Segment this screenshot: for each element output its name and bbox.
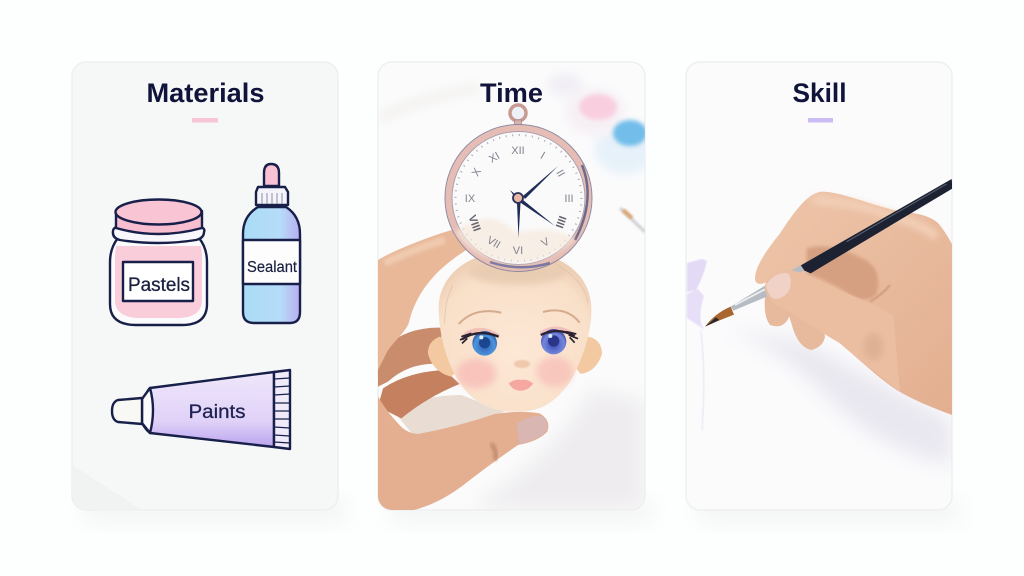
icon: paints tube — [112, 370, 290, 449]
doll head — [428, 251, 602, 412]
dial numerals: IIII — [554, 215, 570, 230]
pocket watch — [445, 105, 592, 272]
eye left — [463, 330, 499, 337]
label: sealant: Sealant — [247, 259, 298, 276]
panel: time — [378, 62, 655, 522]
clock shadow on forehead — [470, 262, 566, 286]
dial numerals: IX — [465, 193, 476, 205]
hand holding doll — [378, 230, 548, 511]
dial numerals — [465, 145, 574, 257]
dial numerals: I — [538, 150, 547, 162]
scalp seam — [445, 263, 588, 323]
face — [439, 251, 591, 412]
dial numerals: XII — [511, 145, 525, 157]
hand shadow — [763, 336, 951, 462]
watch hands — [510, 166, 558, 238]
cheeks — [456, 358, 496, 388]
accent bar: skill — [808, 118, 833, 122]
heading: materials: Materials — [146, 78, 264, 108]
dial numerals: III — [564, 193, 574, 205]
blurred palette background — [380, 73, 655, 232]
dial numerals: V — [539, 236, 552, 250]
dial numerals: VII — [485, 234, 502, 251]
see-through head at base of dial — [455, 218, 575, 263]
brows — [459, 311, 501, 324]
shading between fingers — [807, 246, 878, 299]
lavender paint strokes — [687, 259, 707, 430]
thumbnail — [766, 273, 791, 299]
dial numerals: XI — [487, 150, 502, 166]
icon: sealant bottle — [243, 164, 300, 323]
cast shadow under doll — [494, 394, 644, 508]
nose — [514, 360, 530, 368]
mouth — [509, 380, 533, 391]
watch case — [448, 128, 588, 268]
dial numerals: X — [470, 166, 484, 179]
panel: materials — [72, 62, 346, 522]
label: pastels: Pastels — [128, 275, 190, 296]
dial numerals: II — [553, 168, 567, 179]
fingers behind brush — [765, 290, 825, 350]
thumb — [765, 270, 900, 392]
heading: time: Time — [480, 78, 543, 108]
panel: skill — [686, 62, 960, 522]
eye right — [541, 329, 575, 336]
ears — [428, 336, 454, 376]
accent bar: materials — [192, 118, 218, 122]
icon: pastels jar — [110, 200, 207, 325]
heading: skill: Skill — [792, 78, 846, 108]
palm and back of hand — [755, 192, 955, 416]
label: paints: Paints — [188, 401, 246, 423]
dial numerals: VI — [513, 245, 523, 257]
hand holding brush — [705, 179, 955, 416]
watch loop — [510, 105, 526, 121]
dial numerals: VIII — [466, 214, 483, 233]
brush — [705, 179, 953, 327]
